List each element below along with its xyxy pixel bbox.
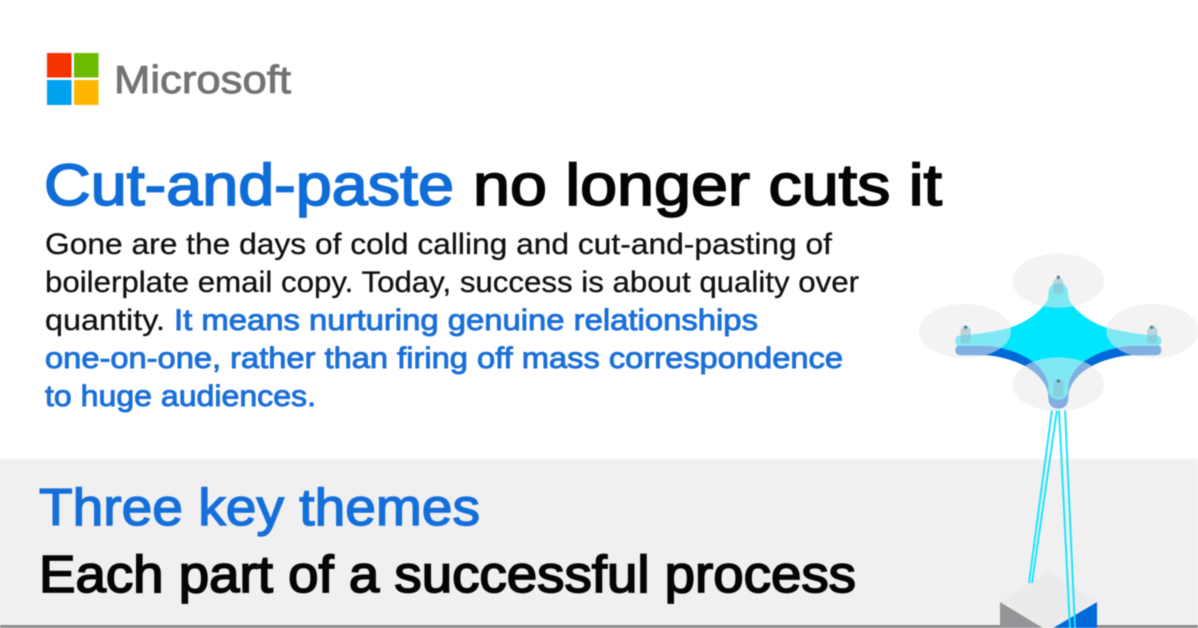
panel: grey themes band [0, 459, 1198, 628]
icon: package [960, 572, 1157, 628]
subheading: each part of a successful process: Each part of a successful process [39, 546, 856, 604]
title [44, 153, 942, 218]
heading: three key themes: Three key themes [39, 479, 480, 537]
intro text block: one-on-one, rather than firing off mass correspondence [45, 342, 843, 375]
intro text block [45, 228, 859, 413]
intro text block: It means nurturing genuine relationships [174, 304, 758, 337]
icon: drone [919, 254, 1198, 411]
intro text block: Gone are the days of cold calling and cut-and-pasting of [45, 228, 833, 261]
drone top surface [955, 283, 1161, 399]
Microsoft logo [47, 53, 291, 105]
intro text block: quantity. [45, 304, 165, 337]
intro text block: to huge audiences. [45, 380, 316, 413]
rotors [919, 254, 1198, 411]
intro text block: boilerplate email copy. Today, success is about quality over [45, 266, 859, 299]
motors [961, 276, 1157, 397]
icon: tether ropes [1029, 410, 1075, 628]
Microsoft logo: Microsoft [114, 59, 291, 102]
title: no longer cuts it [473, 153, 942, 218]
drone underside [955, 293, 1161, 409]
title: Cut-and-paste [44, 153, 454, 218]
